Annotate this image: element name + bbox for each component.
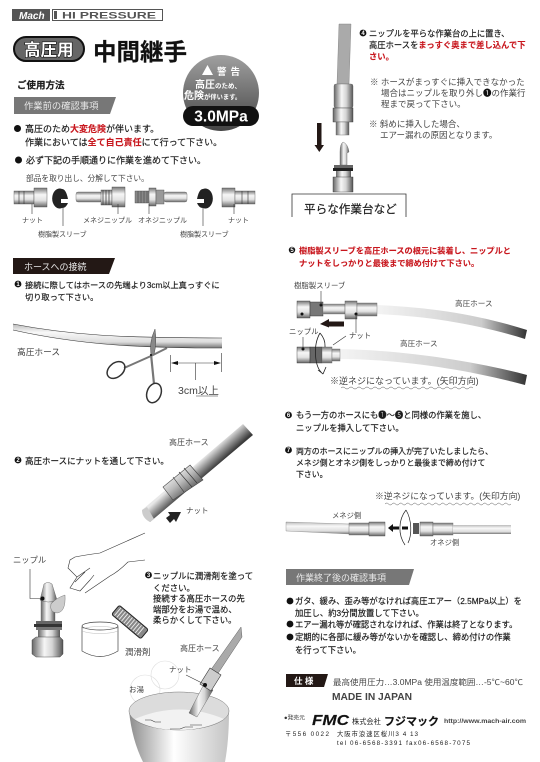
step 4 text: 4 [361, 31, 365, 37]
dimension: 3cm以上 [170, 353, 222, 397]
parts row illustration [14, 187, 255, 238]
hose with nut [333, 24, 353, 135]
company block: http://www.mach-air.com [444, 718, 526, 725]
part: sleeve left [52, 189, 68, 208]
part: sleeve right [197, 188, 213, 208]
step 1 text: 1 [16, 282, 20, 288]
specifications: 仕 様 [294, 676, 314, 686]
section band: ホースへの接続: ホースへの接続 [24, 261, 87, 272]
step 4 text: 高圧ホースをまっすぐ奥まで差し込んで下 [369, 40, 526, 50]
hose cut illustration [13, 324, 222, 405]
step 1 text: 切り取って下さい。 [25, 292, 98, 302]
step 5 text: 5 [290, 248, 294, 254]
jar [82, 622, 118, 656]
step 1 text [15, 280, 220, 302]
step 7 text: 下さい。 [296, 470, 328, 479]
labels: 高圧ホース [400, 338, 438, 348]
hand [68, 533, 145, 593]
jar lid [112, 605, 148, 639]
hose assembly illustration [289, 281, 527, 389]
step 6 text: もう一方のホースにも❶～❺と同様の作業を施し、 [296, 410, 486, 420]
parts row illustration: オネジニップル [138, 216, 187, 224]
section band: 作業終了後の確認事項: 作業終了後の確認事項 [296, 572, 386, 583]
final joint illustration [286, 490, 520, 547]
step 6 text: 6 [287, 413, 291, 419]
step 3 text: 柔らかくして下さい。 [153, 615, 236, 625]
brand header: Mach HI PRESSURE [12, 9, 162, 22]
nipple on table [333, 142, 353, 192]
arrow: left [320, 319, 344, 328]
label: お湯: お湯 [129, 684, 144, 694]
labels: 高圧ホース [455, 298, 493, 308]
parts row illustration: ナット [22, 216, 43, 224]
right fitting [413, 522, 453, 536]
left fitting [349, 522, 385, 536]
label: 高圧ホース: 高圧ホース [17, 346, 60, 357]
section band: ホースへの接続 [13, 258, 115, 274]
step 1 text: 接続に際してはホースの先端より3cm以上真っすぐに [25, 280, 220, 290]
top assembly [297, 301, 527, 339]
final check bullets: エアー漏れ等が確認されなければ、作業は終了となります。 [295, 620, 517, 630]
arrow: push nut [166, 512, 181, 523]
specifications [286, 674, 523, 703]
warning bullets: 必ず下記の手順通りに作業を進めて下さい。 [26, 154, 206, 166]
hot water cup illustration [129, 627, 242, 762]
step 5 text: 樹脂製スリーブを高圧ホースの根元に装着し、ニップルと [299, 246, 511, 256]
step 4 notes: エアー漏れの原因となります。 [380, 130, 497, 140]
lubricant drop [51, 595, 65, 613]
nipple and lubricant illustration [13, 533, 151, 657]
label: ニップル: ニップル [13, 555, 46, 565]
step 4 notes: 程まで戻って下さい。 [381, 99, 466, 109]
labels: ニップル [289, 327, 319, 336]
label: メネジ側: メネジ側 [332, 511, 361, 520]
parts row illustration: 樹脂製スリーブ [180, 230, 229, 238]
step 3 text: 3 [147, 573, 151, 579]
step 6 text: ニップルを挿入して下さい。 [296, 423, 404, 433]
bottom assembly [297, 347, 527, 385]
final check bullets: 加圧し、約3分間放置して下さい。 [295, 608, 424, 618]
company block [284, 712, 526, 747]
text: disassemble parts: 部品を取り出し、分解して下さい。 [26, 173, 149, 183]
work table box [292, 194, 406, 217]
final check bullets [287, 596, 522, 655]
dimension: 3cm以上: 3cm以上 [178, 385, 219, 397]
parts row illustration: メネジニップル [83, 216, 132, 224]
title: 高圧用 中間継手: 中間継手 [93, 39, 187, 65]
step 3 text [145, 571, 253, 625]
label: 高圧ホース: 高圧ホース [169, 437, 209, 447]
step 4 text: ニップルを平らな作業台の上に置き、 [369, 28, 509, 38]
parts row illustration: 樹脂製スリーブ [38, 230, 87, 238]
label: ナット: ナット [169, 665, 192, 674]
part: nut left [14, 188, 47, 207]
company block: フジマック [384, 715, 439, 728]
company block: 株式会社 [352, 717, 381, 726]
warning bullets: 高圧のため大変危険が伴います。 [25, 123, 159, 134]
warning badge: 3.0MPa: 警告 [217, 66, 240, 78]
left hose [286, 522, 350, 534]
label: 潤滑剤: 潤滑剤 [125, 647, 151, 657]
company block: tel 06-6568-3391 fax06-6568-7075 [337, 740, 470, 747]
part: female nipple [76, 187, 125, 207]
part: male nipple [135, 188, 187, 206]
warning badge: 3.0MPa: 高圧のため、 [195, 78, 241, 91]
final check bullets: 定期的に各部に緩み等がないかを確認し、締め付けの作業 [295, 632, 511, 642]
step 7 text [285, 446, 493, 479]
note: reverse thread: ※逆ネジになっています。(矢印方向) [330, 375, 479, 386]
section band: 作業終了後の確認事項 [286, 569, 414, 585]
step 4 notes: ※ ホースがまっすぐに挿入できなかった [370, 77, 525, 87]
cup [129, 692, 229, 762]
step 5 text [289, 246, 511, 268]
specifications: MADE IN JAPAN [332, 691, 412, 703]
step 4 notes: ※ 斜めに挿入した場合、 [369, 119, 465, 129]
title: 高圧用 中間継手: 高圧用 [24, 40, 74, 60]
step 6 text [285, 410, 486, 433]
title: 高圧用 中間継手 [14, 37, 187, 65]
step 3 text: 端部分をお湯で温め、 [153, 604, 237, 614]
nipple [32, 582, 63, 657]
labels: 樹脂製スリーブ [294, 281, 346, 290]
step 7 text: 両方のホースにニップルの挿入が完了いたしましたら、 [296, 446, 493, 456]
work table box: 平らな作業台など [304, 202, 397, 216]
vertical hose and nipple illustration [292, 24, 406, 217]
note: reverse thread: ※逆ネジになっています。(矢印方向) [375, 490, 520, 501]
parts row illustration: ナット [228, 216, 249, 224]
step 4 text: さい。 [369, 52, 394, 62]
warning badge: 3.0MPa: 危険が伴います。 [184, 89, 241, 102]
step 7 text: メネジ側とオネジ側をしっかりと最後まで締め付けて [296, 458, 485, 468]
section band: 作業前の確認事項: 作業前の確認事項 [24, 100, 99, 111]
step 4 text [360, 28, 526, 62]
rotation arrow [400, 510, 411, 545]
specifications: 最高使用圧力…3.0MPa 使用温度範囲…-5℃~60℃ [333, 677, 523, 687]
step 4 notes [369, 77, 526, 140]
brand header: Mach HI PRESSURE: Mach [19, 11, 45, 22]
brand header: Mach HI PRESSURE: HI PRESSURE [62, 10, 156, 20]
step 7 text: 7 [287, 448, 291, 454]
heading: ご使用方法: ご使用方法 [17, 80, 65, 92]
step 3 text: ください。 [153, 583, 195, 593]
icon: scissors [104, 329, 167, 405]
final check bullets: ガタ、緩み、歪み等がなければ高圧エアー（2.5MPa以上）を [295, 596, 522, 606]
hose in water [189, 627, 242, 717]
steam [130, 661, 179, 719]
warning bullets [14, 123, 222, 166]
step 2 text: 2 [16, 458, 20, 464]
company block: 〒556 0022 [285, 731, 329, 738]
label: オネジ側: オネジ側 [430, 538, 459, 547]
company block: 大阪市浪速区桜川3 4 13 [337, 729, 418, 738]
final check bullets: を行って下さい。 [295, 645, 361, 655]
step 5 text: ナットをしっかりと最後まで締め付けて下さい。 [299, 258, 479, 268]
labels: ナット [349, 331, 371, 340]
section band: 作業前の確認事項 [14, 97, 116, 114]
part: nut right [222, 188, 255, 207]
right hose [453, 525, 511, 534]
step 4 notes: 場合はニップルを取り外し❶の作業行 [381, 88, 526, 98]
hose with nut illustration [142, 424, 253, 523]
nut on hose [163, 465, 203, 500]
label: 高圧ホース: 高圧ホース [180, 643, 220, 653]
arrow: down [314, 123, 324, 152]
label: ナット: ナット [186, 506, 208, 515]
step 3 text: 接続する高圧ホースの先 [153, 594, 245, 604]
warning badge: 3.0MPa [183, 55, 259, 131]
step 3 text: ニップルに潤滑剤を塗って [153, 571, 253, 581]
rotation arrow [315, 333, 326, 374]
arrow: join [388, 524, 399, 532]
company block: ●発売元 [284, 714, 305, 722]
labels [289, 281, 493, 349]
logo: FMC: FMC [312, 712, 350, 729]
warning bullets: 作業においては全て自己責任にて行って下さい。 [25, 136, 222, 148]
step 2 text: 高圧ホースにナットを通して下さい。 [25, 456, 169, 466]
warning badge: 3.0MPa: 3.0MPa [194, 108, 248, 126]
